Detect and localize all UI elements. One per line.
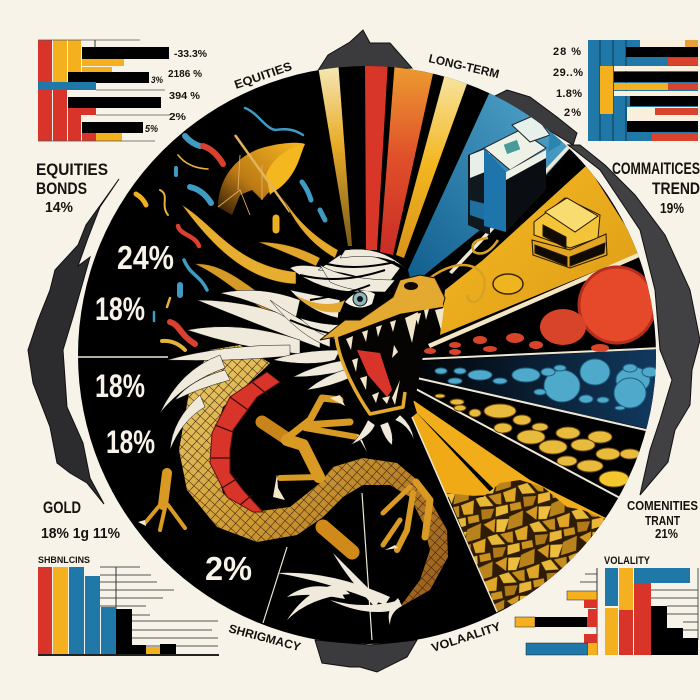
eye bbox=[345, 291, 375, 308]
slice: amber lower wedge bbox=[412, 413, 493, 497]
heading: commodities trant: 21% bbox=[655, 526, 678, 541]
chart labels: top left: 2% bbox=[169, 112, 186, 123]
arc label volaality: VOLAALITY bbox=[430, 619, 502, 655]
brow bbox=[295, 295, 345, 312]
percentages on pie: 18% bbox=[95, 368, 145, 404]
chart labels: top right: 1.8% bbox=[556, 88, 582, 100]
mouth bbox=[335, 305, 443, 416]
slice: yellow bbox=[396, 70, 472, 258]
chart labels: top left: 3% bbox=[151, 75, 163, 85]
nostril bbox=[404, 282, 418, 290]
coins blue bbox=[435, 359, 658, 410]
chart: top right bbox=[588, 40, 698, 141]
chart: top left bbox=[38, 40, 170, 141]
fangs bbox=[346, 308, 444, 405]
heading: commodities trend: 19% bbox=[660, 200, 684, 217]
chart: bottom right bbox=[515, 568, 698, 655]
chart: bottom left bbox=[38, 567, 219, 656]
slice: cream divider bbox=[449, 145, 571, 274]
chart caption right: VOLALITY bbox=[604, 555, 651, 567]
heading: equities bonds: BONDS bbox=[36, 179, 87, 198]
line bbox=[417, 378, 650, 431]
heading: gold bbox=[41, 498, 120, 542]
chart labels: top right: 29..% bbox=[553, 67, 583, 79]
dark mane lines bbox=[290, 262, 395, 335]
chart labels: top right: 28 % bbox=[553, 46, 581, 58]
chart labels: top right: 2% bbox=[564, 107, 581, 119]
arc label shrigmacy: SHRIGMACY bbox=[227, 621, 302, 654]
chart labels: top left: 394 % bbox=[169, 91, 200, 102]
arc label long-term: LONG-TERM bbox=[427, 51, 501, 81]
slice: amber upper wedge bbox=[413, 400, 610, 520]
chart caption left: SHBNLCINS bbox=[38, 555, 90, 565]
line bbox=[414, 388, 620, 498]
mane bbox=[160, 249, 414, 450]
heading: equities bonds bbox=[36, 160, 108, 216]
confetti drops bbox=[136, 108, 325, 350]
arms and legs bbox=[145, 398, 430, 552]
umbrella bbox=[218, 135, 305, 215]
red belly bbox=[210, 372, 280, 512]
slice: blue bbox=[408, 93, 574, 277]
heading: equities bonds: 14% bbox=[45, 199, 73, 216]
horns bbox=[182, 198, 338, 314]
percentages on pie bbox=[95, 239, 252, 587]
coins gold bbox=[435, 394, 640, 487]
pie disc with slices bbox=[78, 66, 656, 644]
money stacks bbox=[468, 115, 565, 235]
coins red bbox=[424, 267, 655, 355]
slice: nuggets bbox=[447, 480, 612, 612]
chart labels: top left: 2186 % bbox=[168, 69, 202, 80]
slice: pills bbox=[422, 349, 656, 428]
single gold coin bbox=[493, 274, 523, 294]
slice: dark divider bbox=[546, 148, 587, 176]
slice: orange red bbox=[380, 60, 436, 255]
belly segments bbox=[211, 382, 268, 505]
line bbox=[412, 417, 497, 612]
chart labels: top left bbox=[145, 49, 207, 135]
heading: commodities trend bbox=[612, 159, 700, 217]
percentages on pie: 24% bbox=[117, 239, 174, 276]
percentages on pie: 18% bbox=[95, 291, 145, 327]
left divider bbox=[70, 356, 168, 358]
hook handles bbox=[430, 238, 498, 302]
thin lines bottom bbox=[263, 493, 372, 640]
chart labels: top left: 5% bbox=[145, 124, 158, 135]
line bbox=[400, 348, 662, 360]
slice: cream gold bbox=[317, 60, 352, 246]
slice: yellow bricks bbox=[440, 165, 642, 335]
heading: gold: GOLD bbox=[43, 498, 81, 517]
percentages on pie: 2% bbox=[205, 550, 252, 587]
jaw outline bbox=[336, 305, 443, 414]
dragon bbox=[138, 198, 448, 625]
cream line bbox=[428, 252, 642, 348]
claws bbox=[138, 395, 398, 550]
heading: gold: 18% 1g 11% bbox=[41, 525, 120, 542]
body coil bbox=[179, 345, 448, 607]
tongue bbox=[357, 350, 392, 397]
chart labels: top right bbox=[553, 46, 583, 119]
arc label equities: EQUITIES bbox=[232, 59, 294, 92]
percentages on pie: 18% bbox=[106, 424, 155, 460]
slice: red bbox=[365, 60, 388, 250]
lower fur bbox=[277, 553, 402, 625]
chart labels: top left: -33.3% bbox=[174, 49, 207, 60]
face bbox=[320, 275, 445, 340]
heading: commodities trant: TRANT bbox=[645, 513, 680, 528]
heading: commodities trant bbox=[627, 498, 698, 541]
heading: equities bonds: EQUITIES bbox=[36, 160, 108, 179]
body scales bbox=[179, 345, 448, 607]
gold bricks bbox=[532, 198, 607, 268]
